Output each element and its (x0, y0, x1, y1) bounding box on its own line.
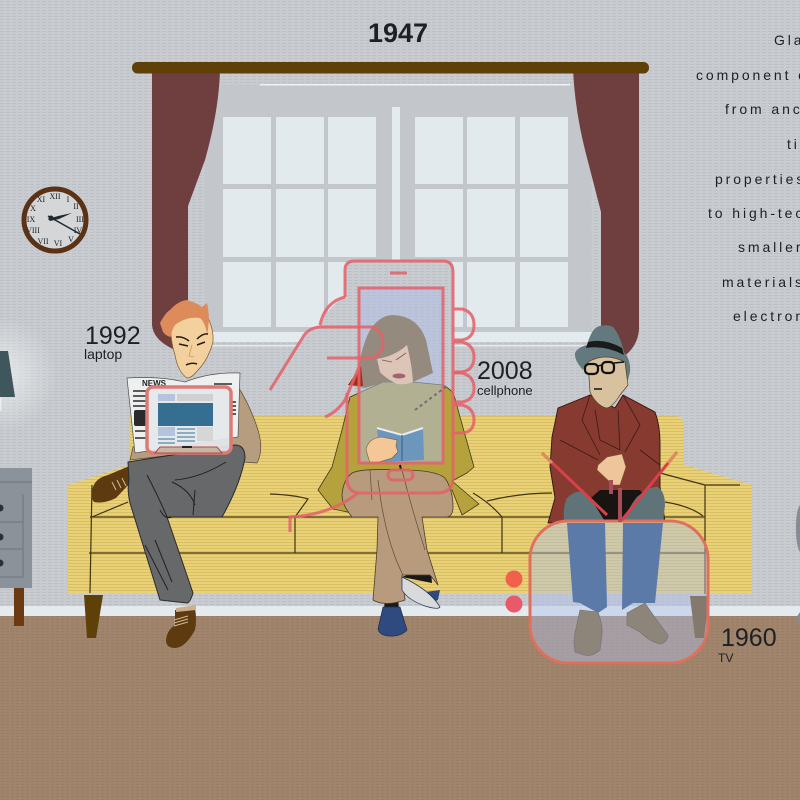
label 1960 TV: 1960 (721, 624, 777, 652)
lamp (0, 317, 58, 433)
right-edge object (796, 505, 800, 626)
hat (575, 325, 630, 380)
TV antennas and cane (542, 452, 677, 522)
trailing shoe (92, 465, 133, 502)
wall clock: VII (37, 237, 49, 246)
man with newspaper (92, 300, 261, 648)
right curtain (573, 70, 639, 360)
newspaper (127, 373, 240, 453)
wall clock: XII (49, 192, 61, 201)
wall clock: VI (54, 239, 63, 248)
head (171, 316, 213, 378)
wall clock: I (67, 195, 70, 204)
laptop icon (147, 387, 231, 453)
face (588, 357, 628, 408)
woman reading body (318, 382, 479, 636)
wall clock (24, 189, 86, 251)
label 1992 laptop: 1992 (85, 322, 141, 350)
wall clock: IX (27, 215, 35, 224)
label 1960 TV (718, 624, 777, 665)
TV knob top (506, 570, 522, 588)
man with newspaper: NEWS (142, 379, 167, 388)
shirt (130, 385, 261, 463)
cellphone and hand icon (270, 261, 474, 532)
left curtain (152, 70, 220, 350)
baseboard (0, 606, 800, 616)
window (190, 84, 602, 346)
label 1992 laptop (84, 322, 141, 362)
label 2008 cellphone (477, 357, 533, 398)
trousers (128, 445, 245, 603)
TV knob bottom (506, 596, 522, 612)
wall clock: IV (74, 226, 82, 235)
phone and hand background (272, 260, 453, 417)
wall background (0, 0, 800, 610)
wall clock: V (68, 235, 74, 244)
wall clock: XI (37, 195, 46, 204)
wall clock: II (73, 202, 79, 211)
label 2008 cellphone: 2008 (477, 357, 533, 385)
woman head and book (348, 315, 433, 470)
curtain rod (132, 62, 649, 74)
label 1960 TV: TV (718, 651, 733, 665)
old man upper body (548, 325, 665, 523)
old man legs and shoes (567, 523, 668, 655)
title year 1947: 1947 (368, 18, 428, 48)
phone dashed cord (415, 386, 447, 410)
hands (597, 454, 626, 485)
TV icon (530, 521, 708, 663)
lower shoe (166, 608, 196, 648)
wall clock: VIII (26, 226, 40, 235)
nightstand (0, 468, 32, 626)
wall clock: III (76, 215, 84, 224)
wall clock: X (30, 204, 36, 213)
floor (0, 616, 800, 800)
label 2008 cellphone: cellphone (477, 383, 533, 398)
label 1992 laptop: laptop (84, 346, 122, 362)
sofa (68, 416, 752, 638)
phone screen (359, 288, 443, 463)
knees (564, 492, 605, 522)
description text (696, 32, 800, 324)
